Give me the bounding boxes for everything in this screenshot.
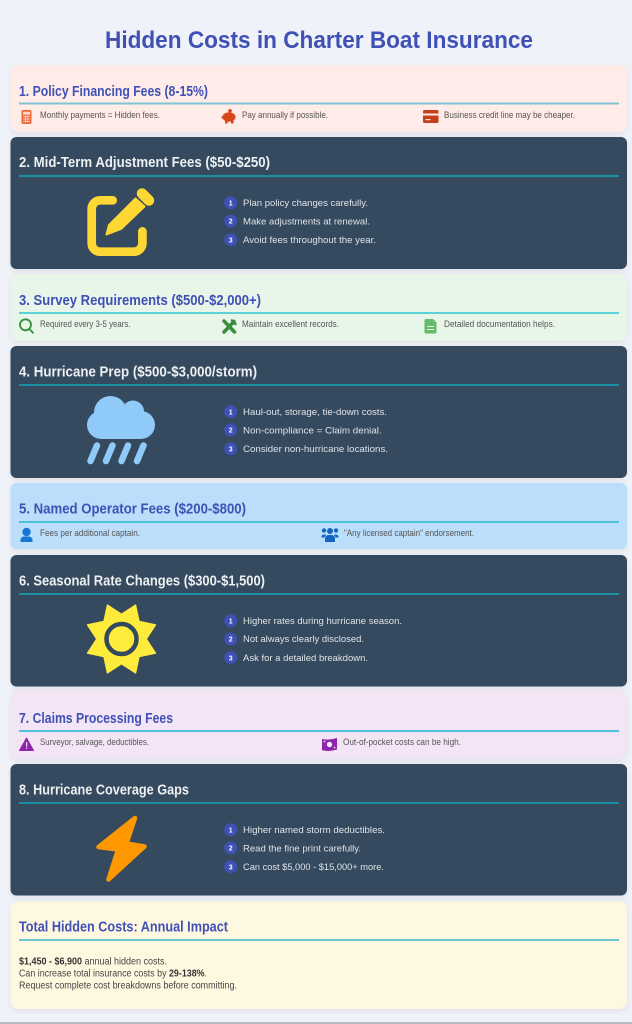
text: monthly payments: Monthly payments = Hidden fees. — [40, 110, 160, 121]
list: seasonal steps: 3 — [229, 655, 233, 662]
heading: named operator: 5. Named Operator Fees ($200-$800) — [19, 502, 246, 518]
list: mid-term steps — [224, 196, 376, 246]
panel: 2. mid-term adjustment fees — [10, 137, 627, 269]
icon: group of people — [321, 528, 339, 542]
list: hurricane prep steps — [224, 405, 388, 455]
list: coverage gaps steps: 3 — [229, 864, 233, 871]
list: hurricane prep steps: Consider non-hurricane locations. — [243, 444, 388, 455]
heading: total: Total Hidden Costs: Annual Impact — [19, 919, 228, 935]
icon: captain — [20, 528, 32, 542]
list: coverage gaps steps: Can cost $5,000 - $15,000+ more. — [243, 862, 384, 873]
text: detailed documentation: Detailed documentation helps. — [444, 319, 555, 330]
icon: credit card — [423, 110, 438, 123]
heading: mid-term: 2. Mid-Term Adjustment Fees ($50-$250) — [19, 155, 270, 171]
text: fees per captain: Fees per additional captain. — [40, 528, 140, 539]
list: coverage gaps steps: Higher named storm deductibles. — [243, 825, 385, 836]
icon: document — [424, 319, 436, 334]
icon: tools — [224, 320, 236, 332]
text: summary — [19, 956, 237, 992]
list: hurricane prep steps: 1 — [229, 409, 233, 416]
panel: 6. seasonal rate changes — [10, 555, 627, 686]
heading: policy financing: 1. Policy Financing Fees (8-15%) — [19, 84, 208, 100]
list: seasonal steps: 1 — [229, 618, 233, 625]
panel: 5. named operator fees — [10, 483, 627, 549]
icon: warning triangle — [20, 738, 34, 750]
heading: hurricane prep: 4. Hurricane Prep ($500-$3,000/storm) — [19, 365, 257, 381]
panel: 4. hurricane prep — [10, 346, 627, 478]
list: seasonal steps: 2 — [229, 637, 233, 644]
list: hurricane prep steps: 3 — [229, 446, 233, 453]
list: mid-term steps: Make adjustments at renewal. — [243, 216, 370, 228]
panel: total hidden costs — [10, 902, 627, 1009]
list: seasonal steps — [224, 614, 402, 664]
text: summary: $1,450 - $6,900 annual hidden costs. — [19, 956, 167, 967]
list: hurricane prep steps: 2 — [229, 428, 233, 435]
list: hurricane prep steps: Haul-out, storage, tie-down costs. — [243, 407, 387, 418]
icon: magnifier — [20, 319, 33, 333]
panel: 8. hurricane coverage gaps — [10, 764, 627, 896]
text: business credit: Business credit line may be cheaper. — [444, 110, 575, 121]
heading: coverage gaps: 8. Hurricane Coverage Gaps — [19, 783, 189, 799]
list: mid-term steps: 3 — [229, 237, 233, 244]
panel: 3. survey requirements — [10, 274, 627, 341]
text: required every: Required every 3-5 years. — [40, 319, 130, 330]
heading: seasonal: 6. Seasonal Rate Changes ($300-$1,500) — [19, 574, 265, 590]
icon: rain cloud — [87, 396, 155, 461]
icon: edit pencil — [92, 194, 149, 252]
panel: 7. claims processing fees — [10, 690, 627, 759]
icon: sun — [87, 605, 156, 673]
list: mid-term steps: Plan policy changes carefully. — [243, 198, 368, 209]
icon: calculator — [22, 110, 32, 124]
list: coverage gaps steps: 2 — [229, 846, 233, 853]
text: any licensed captain: "Any licensed captain" endorsement. — [344, 528, 474, 539]
list: seasonal steps: Higher rates during hurricane season. — [243, 616, 402, 627]
text: maintain records: Maintain excellent records. — [242, 319, 339, 330]
list: mid-term steps: Avoid fees throughout the year. — [243, 235, 376, 246]
text: surveyor salvage: Surveyor, salvage, deductibles. — [40, 737, 149, 748]
icon: money — [322, 738, 337, 751]
heading: survey: 3. Survey Requirements ($500-$2,000+) — [19, 293, 261, 309]
list: coverage gaps steps — [224, 823, 385, 873]
text: pay annually: Pay annually if possible. — [242, 110, 328, 121]
text: summary: Request complete cost breakdowns before committing. — [19, 980, 237, 992]
list: coverage gaps steps: Read the fine print carefully. — [243, 844, 361, 854]
icon: lightning bolt — [98, 818, 144, 880]
list: seasonal steps: Not always clearly disclosed. — [243, 634, 364, 645]
panel: 1. policy financing fees — [10, 65, 627, 132]
list: mid-term steps: 2 — [229, 219, 233, 226]
list: hurricane prep steps: Non-compliance = Claim denial. — [243, 426, 382, 436]
icon: piggy bank — [221, 109, 236, 124]
list: coverage gaps steps: 1 — [229, 827, 233, 834]
title: Hidden Costs in Charter Boat Insurance — [105, 27, 533, 54]
heading: claims: 7. Claims Processing Fees — [19, 711, 173, 727]
text: out-of-pocket: Out-of-pocket costs can be high. — [343, 737, 461, 748]
list: mid-term steps: 1 — [229, 200, 233, 207]
list: seasonal steps: Ask for a detailed breakdown. — [243, 653, 368, 664]
text: summary: Can increase total insurance costs by 29-138%. — [19, 968, 207, 980]
